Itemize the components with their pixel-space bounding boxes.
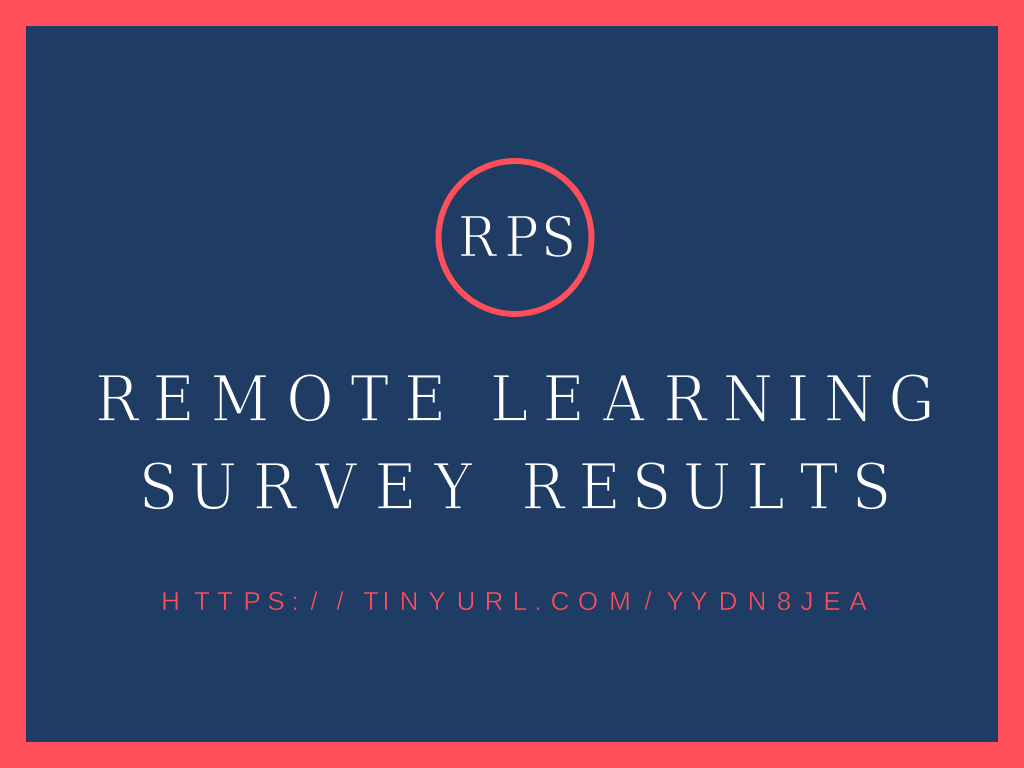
title line 2: SURVEY RESULTS <box>139 450 891 525</box>
title <box>95 362 935 525</box>
icon: RPS logo ring <box>438 161 592 314</box>
link text: HTTPS://TINYURL.COM/YYDN8JEA <box>161 586 867 616</box>
title line 1: REMOTE LEARNING <box>95 362 935 437</box>
logo text RPS: RPS <box>458 204 576 270</box>
